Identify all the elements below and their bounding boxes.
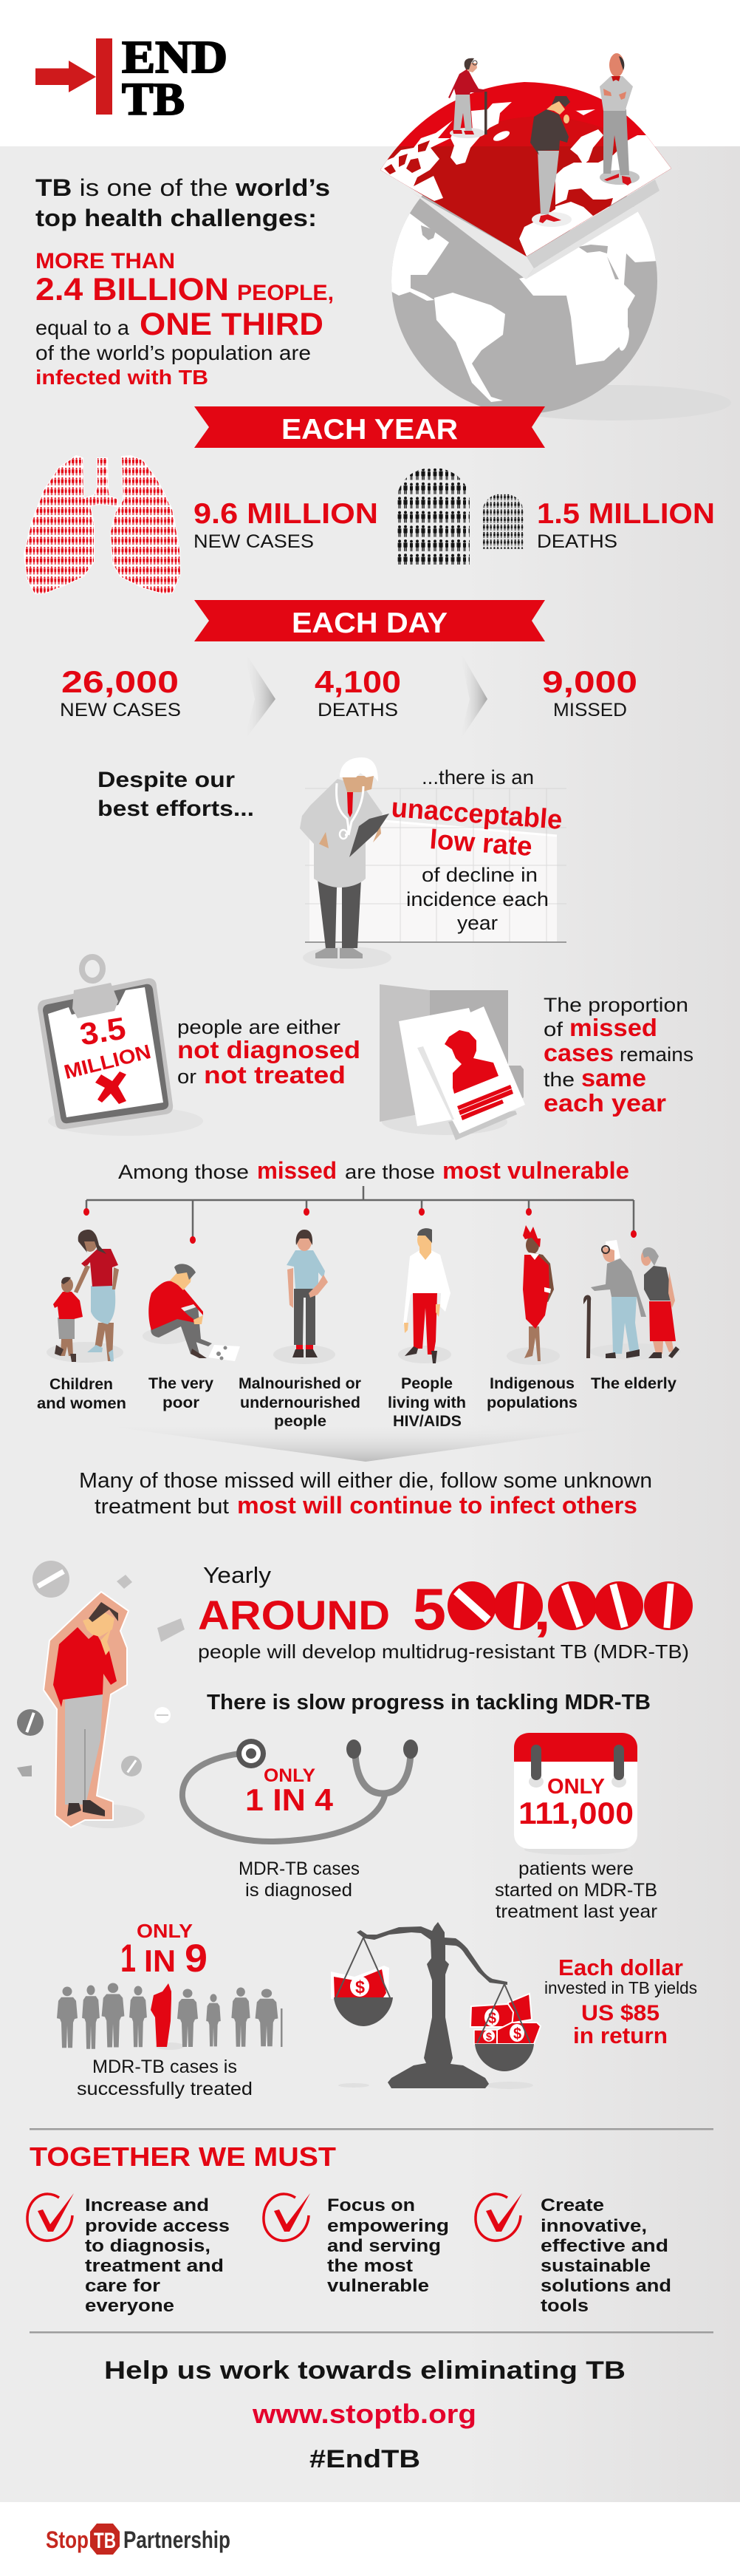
text block: missed cases remain the same: each year <box>544 1089 666 1117</box>
text block: not diagnosed or not treated: people are either <box>177 1016 340 1038</box>
group labels: Children <box>49 1376 113 1393</box>
text block: many of those missed: treatment but <box>95 1495 229 1519</box>
stat: only 111,000: ONLY <box>547 1775 605 1799</box>
text block: not diagnosed or not treated: or <box>177 1066 196 1088</box>
text block: missed cases remain the same: the <box>544 1069 575 1091</box>
stat: only 1 in 4 <box>239 1765 360 1901</box>
stat: 26,000 new cases <box>60 664 181 720</box>
icon: money on right pan: $ <box>513 2025 521 2042</box>
icon: check 3 <box>476 2193 522 2241</box>
stat: only 111,000: started on MDR-TB <box>495 1880 657 1901</box>
text block: action 1: care for <box>85 2276 160 2296</box>
text block: not diagnosed or not treated: not treated <box>204 1061 346 1088</box>
heading: around 500,000 <box>198 1562 693 1663</box>
stat: 9.6 million new cases <box>193 498 378 552</box>
logo: Stop TB Partnership: Partnership <box>123 2526 230 2553</box>
stat: 9,000 missed: MISSED <box>553 700 627 720</box>
icon: pill zeros <box>448 1581 693 1630</box>
text block: action 2: vulnerable <box>327 2276 429 2296</box>
icon: patient folder <box>380 984 525 1140</box>
caption: 1 in 9: MDR-TB cases is <box>92 2057 237 2077</box>
text block: each dollar: invested in TB yields <box>544 1978 697 1997</box>
logo: End TB <box>35 33 227 125</box>
text block: action 2: and serving <box>327 2236 441 2256</box>
group labels: poor <box>162 1394 199 1411</box>
figure: child and woman <box>47 1230 123 1363</box>
caption: 1 in 9: successfully treated <box>77 2079 253 2099</box>
text block: not diagnosed or not treated <box>177 1016 360 1088</box>
icon: clipboard 3.5 million: 3.5 <box>78 1010 128 1052</box>
intro text block: top health challenges: <box>35 205 317 231</box>
caption: 1 in 9 <box>77 2057 253 2099</box>
intro text block: infected with TB <box>35 366 208 389</box>
icon: balance scale with money <box>331 1922 541 2089</box>
group labels: and women <box>37 1395 126 1412</box>
connector tree <box>83 1186 637 1244</box>
stat: only 1 in 9: 1 <box>120 1937 136 1980</box>
stat: only 1 in 9: ONLY <box>137 1920 193 1942</box>
text block: many of those missed: most will continue to infect others <box>237 1492 637 1519</box>
banner: each year <box>194 406 545 448</box>
stat: 26,000 new cases: 26,000 <box>61 664 179 699</box>
text block: unacceptable low rate: year <box>457 912 498 934</box>
group labels: The very <box>148 1375 213 1392</box>
text block: unacceptable low rate: ...there is an <box>422 766 534 788</box>
group labels: populations <box>487 1394 578 1411</box>
text block: each dollar <box>544 1955 697 2048</box>
text block: action 1: treatment and <box>85 2256 224 2276</box>
arrow: down chevron <box>81 1422 650 1462</box>
intro text block: equal to a <box>35 316 129 339</box>
text block: action 3: sustainable <box>541 2256 651 2276</box>
heading: around 500,000: 5 <box>413 1576 446 1642</box>
text block: many of those missed <box>79 1469 652 1519</box>
intro text block: of the world’s population are <box>35 341 311 364</box>
intro text block: ONE THIRD <box>140 307 323 342</box>
text block: action 3: tools <box>541 2296 589 2316</box>
figure: doctor with clipboard <box>300 757 391 969</box>
icon: clipboard 3.5 million: MILLION <box>62 1040 153 1083</box>
logo: Stop TB Partnership: TB <box>94 2529 116 2553</box>
banner: each day: EACH DAY <box>292 607 448 639</box>
text block: missed cases remain the same: missed <box>569 1014 657 1041</box>
arrow: chevron 2 <box>459 650 487 741</box>
text block: unacceptable low rate: low rate <box>428 824 533 862</box>
group labels <box>37 1375 676 1430</box>
heading: around 500,000: AROUND <box>198 1592 390 1638</box>
logo: End TB: END <box>122 33 227 83</box>
logo: Stop TB Partnership: Stop <box>46 2526 89 2553</box>
text block: each dollar: Each dollar <box>558 1955 683 1980</box>
logo: End TB: TB <box>122 75 185 125</box>
heading: despite our best efforts <box>97 768 254 821</box>
map fold thickness <box>410 191 534 279</box>
stat: 9,000 missed: 9,000 <box>542 664 637 699</box>
icon: stethoscope <box>182 1739 418 1841</box>
stat: only 111,000: 111,000 <box>518 1796 634 1830</box>
icon: check 1 <box>27 2193 74 2241</box>
text block: action 3 <box>541 2195 671 2316</box>
heading: most vulnerable: are those <box>345 1161 435 1183</box>
heading: around 500,000: Yearly <box>203 1562 272 1588</box>
chart: declining incidence <box>305 788 566 942</box>
stat: only 1 in 9 <box>120 1920 208 1980</box>
text block: action 3: solutions and <box>541 2276 671 2296</box>
red dome map <box>380 82 671 256</box>
figure: elderly couple <box>583 1240 681 1360</box>
icon: clipboard 3.5 million <box>38 957 203 1136</box>
text block: action 1: to diagnosis, <box>85 2236 210 2256</box>
stat: only 111,000: treatment last year <box>496 1901 657 1922</box>
stat: only 1 in 4: MDR-TB cases <box>239 1858 360 1879</box>
intro text block: MORE THAN <box>35 249 175 273</box>
text block: unacceptable low rate: unacceptable <box>390 792 563 835</box>
heading: around 500,000: , <box>533 1583 551 1640</box>
stat: only 111,000 <box>495 1775 657 1922</box>
figure: sick man surrounded by pills <box>17 1561 185 1828</box>
heading: despite our best efforts: best efforts... <box>97 797 254 821</box>
group labels: HIV/AIDS <box>393 1413 462 1430</box>
stat: 1.5 million deaths <box>537 498 715 552</box>
person: man in dark sweater <box>530 96 572 227</box>
text block: action 3: Create <box>541 2195 604 2215</box>
icon: large tombstone of people <box>397 468 470 565</box>
text block: missed cases remain the same: remains <box>620 1043 693 1066</box>
stat: only 1 in 9: 9 <box>185 1937 208 1980</box>
intro text block: TB is one of the world’s <box>35 174 330 201</box>
stat: 1.5 million deaths: 1.5 MILLION <box>537 498 715 530</box>
lower globe <box>391 195 657 412</box>
stat: only 1 in 4: ONLY <box>264 1765 315 1786</box>
globe shadow <box>495 385 731 420</box>
heading: most vulnerable: Among those <box>118 1161 249 1183</box>
figure: malnourished person <box>273 1230 335 1364</box>
text block: missed cases remain the same: The proportion <box>544 994 688 1016</box>
icon: floating pills <box>17 1561 185 1776</box>
stat: 4,100 deaths: DEATHS <box>318 700 398 720</box>
text block: action 2: empowering <box>327 2216 449 2236</box>
stat: 4,100 deaths: 4,100 <box>315 664 401 699</box>
icon: small tombstone of people <box>482 494 524 549</box>
person: bald man with crossed arms <box>600 53 640 185</box>
call to action <box>104 2357 626 2473</box>
text block: action 1: Increase and <box>85 2195 209 2215</box>
text block: action 3: effective and <box>541 2236 668 2256</box>
heading: around 500,000: people will develop multidrug-resistant TB (MDR-TB) <box>198 1640 689 1663</box>
group labels: The elderly <box>591 1375 676 1392</box>
text block: action 1 <box>85 2195 230 2316</box>
text block: action 2 <box>327 2195 449 2296</box>
heading: most vulnerable: missed <box>257 1157 337 1184</box>
text block: missed cases remain the same <box>544 994 693 1117</box>
call to action: Help us work towards eliminating TB <box>104 2357 626 2385</box>
text block: each dollar: in return <box>573 2023 668 2048</box>
text block: action 2: the most <box>327 2256 413 2276</box>
intro text block: PEOPLE, <box>237 281 334 305</box>
group labels: Indigenous <box>490 1375 575 1392</box>
text block: unacceptable low rate: of decline in <box>422 864 538 886</box>
stat: only 1 in 4: is diagnosed <box>245 1880 352 1901</box>
icon: calendar <box>514 1733 637 1855</box>
icon: money on left pan: $ <box>355 1977 366 1997</box>
stat: 9.6 million new cases: 9.6 MILLION <box>193 498 378 530</box>
stat: 4,100 deaths <box>315 664 401 720</box>
arrow: chevron 1 <box>244 650 275 741</box>
group labels: undernourished <box>240 1394 360 1411</box>
intro text block: 2.4 BILLION <box>35 272 229 307</box>
call to action: #EndTB <box>309 2445 420 2473</box>
heading: slow progress: There is slow progress in tackling MDR-TB <box>207 1691 651 1714</box>
group labels: Malnourished or <box>239 1375 361 1392</box>
heading: most vulnerable <box>118 1157 629 1184</box>
text block: action 2: Focus on <box>327 2195 415 2215</box>
person: old man with cane <box>448 58 487 138</box>
stat: 26,000 new cases: NEW CASES <box>60 700 181 720</box>
heading: most vulnerable: most vulnerable <box>442 1157 629 1184</box>
stat: 9,000 missed <box>542 664 637 720</box>
icon: row of nine people <box>57 1983 282 2050</box>
group labels: People <box>401 1375 453 1392</box>
stat: only 1 in 9: IN <box>144 1943 176 1978</box>
text block: action 1: provide access <box>85 2216 230 2236</box>
icon: money on left pan <box>331 1966 389 1999</box>
logo: Stop TB Partnership <box>46 2524 230 2555</box>
text block: missed cases remain the same: of <box>544 1018 563 1040</box>
icon: money on right pan: $ <box>486 2031 493 2043</box>
text block: missed cases remain the same: cases <box>544 1039 614 1066</box>
figure: indigenous woman <box>507 1225 560 1365</box>
heading: together we must: TOGETHER WE MUST <box>30 2141 336 2172</box>
stat: only 1 in 4: 1 IN 4 <box>245 1782 334 1817</box>
stat: 1.5 million deaths: DEATHS <box>537 531 617 552</box>
text block: unacceptable low rate: incidence each <box>406 888 549 910</box>
banner: each day <box>194 600 545 641</box>
group labels: people <box>274 1413 326 1430</box>
icon: money on right pan: $ <box>488 2010 496 2027</box>
text block: each dollar: US $85 <box>581 2001 660 2025</box>
text block: not diagnosed or not treated: not diagnosed <box>177 1036 360 1063</box>
stat: 9.6 million new cases: NEW CASES <box>193 531 314 552</box>
text block: unacceptable low rate <box>390 766 563 934</box>
stat: only 111,000: patients were <box>518 1858 634 1879</box>
text block: missed cases remain the same: same <box>581 1064 646 1091</box>
icon: lungs made of people <box>24 456 180 593</box>
icon: money on right pan <box>470 1994 541 2044</box>
text block: many of those missed: Many of those missed will either die, follow some unknown <box>79 1469 652 1493</box>
globe illustration with peeled map and three people <box>380 53 671 420</box>
text block: action 3: innovative, <box>541 2216 647 2236</box>
banner: each year: EACH YEAR <box>281 414 458 446</box>
intro text block <box>35 174 334 389</box>
call to action: www.stoptb.org <box>252 2399 476 2429</box>
heading: despite our best efforts: Despite our <box>97 768 235 792</box>
text block: action 1: everyone <box>85 2296 174 2316</box>
figure: person living with HIV <box>398 1228 451 1363</box>
group labels: living with <box>388 1394 466 1411</box>
icon: check 2 <box>264 2193 310 2241</box>
figure: the very poor <box>143 1264 240 1361</box>
